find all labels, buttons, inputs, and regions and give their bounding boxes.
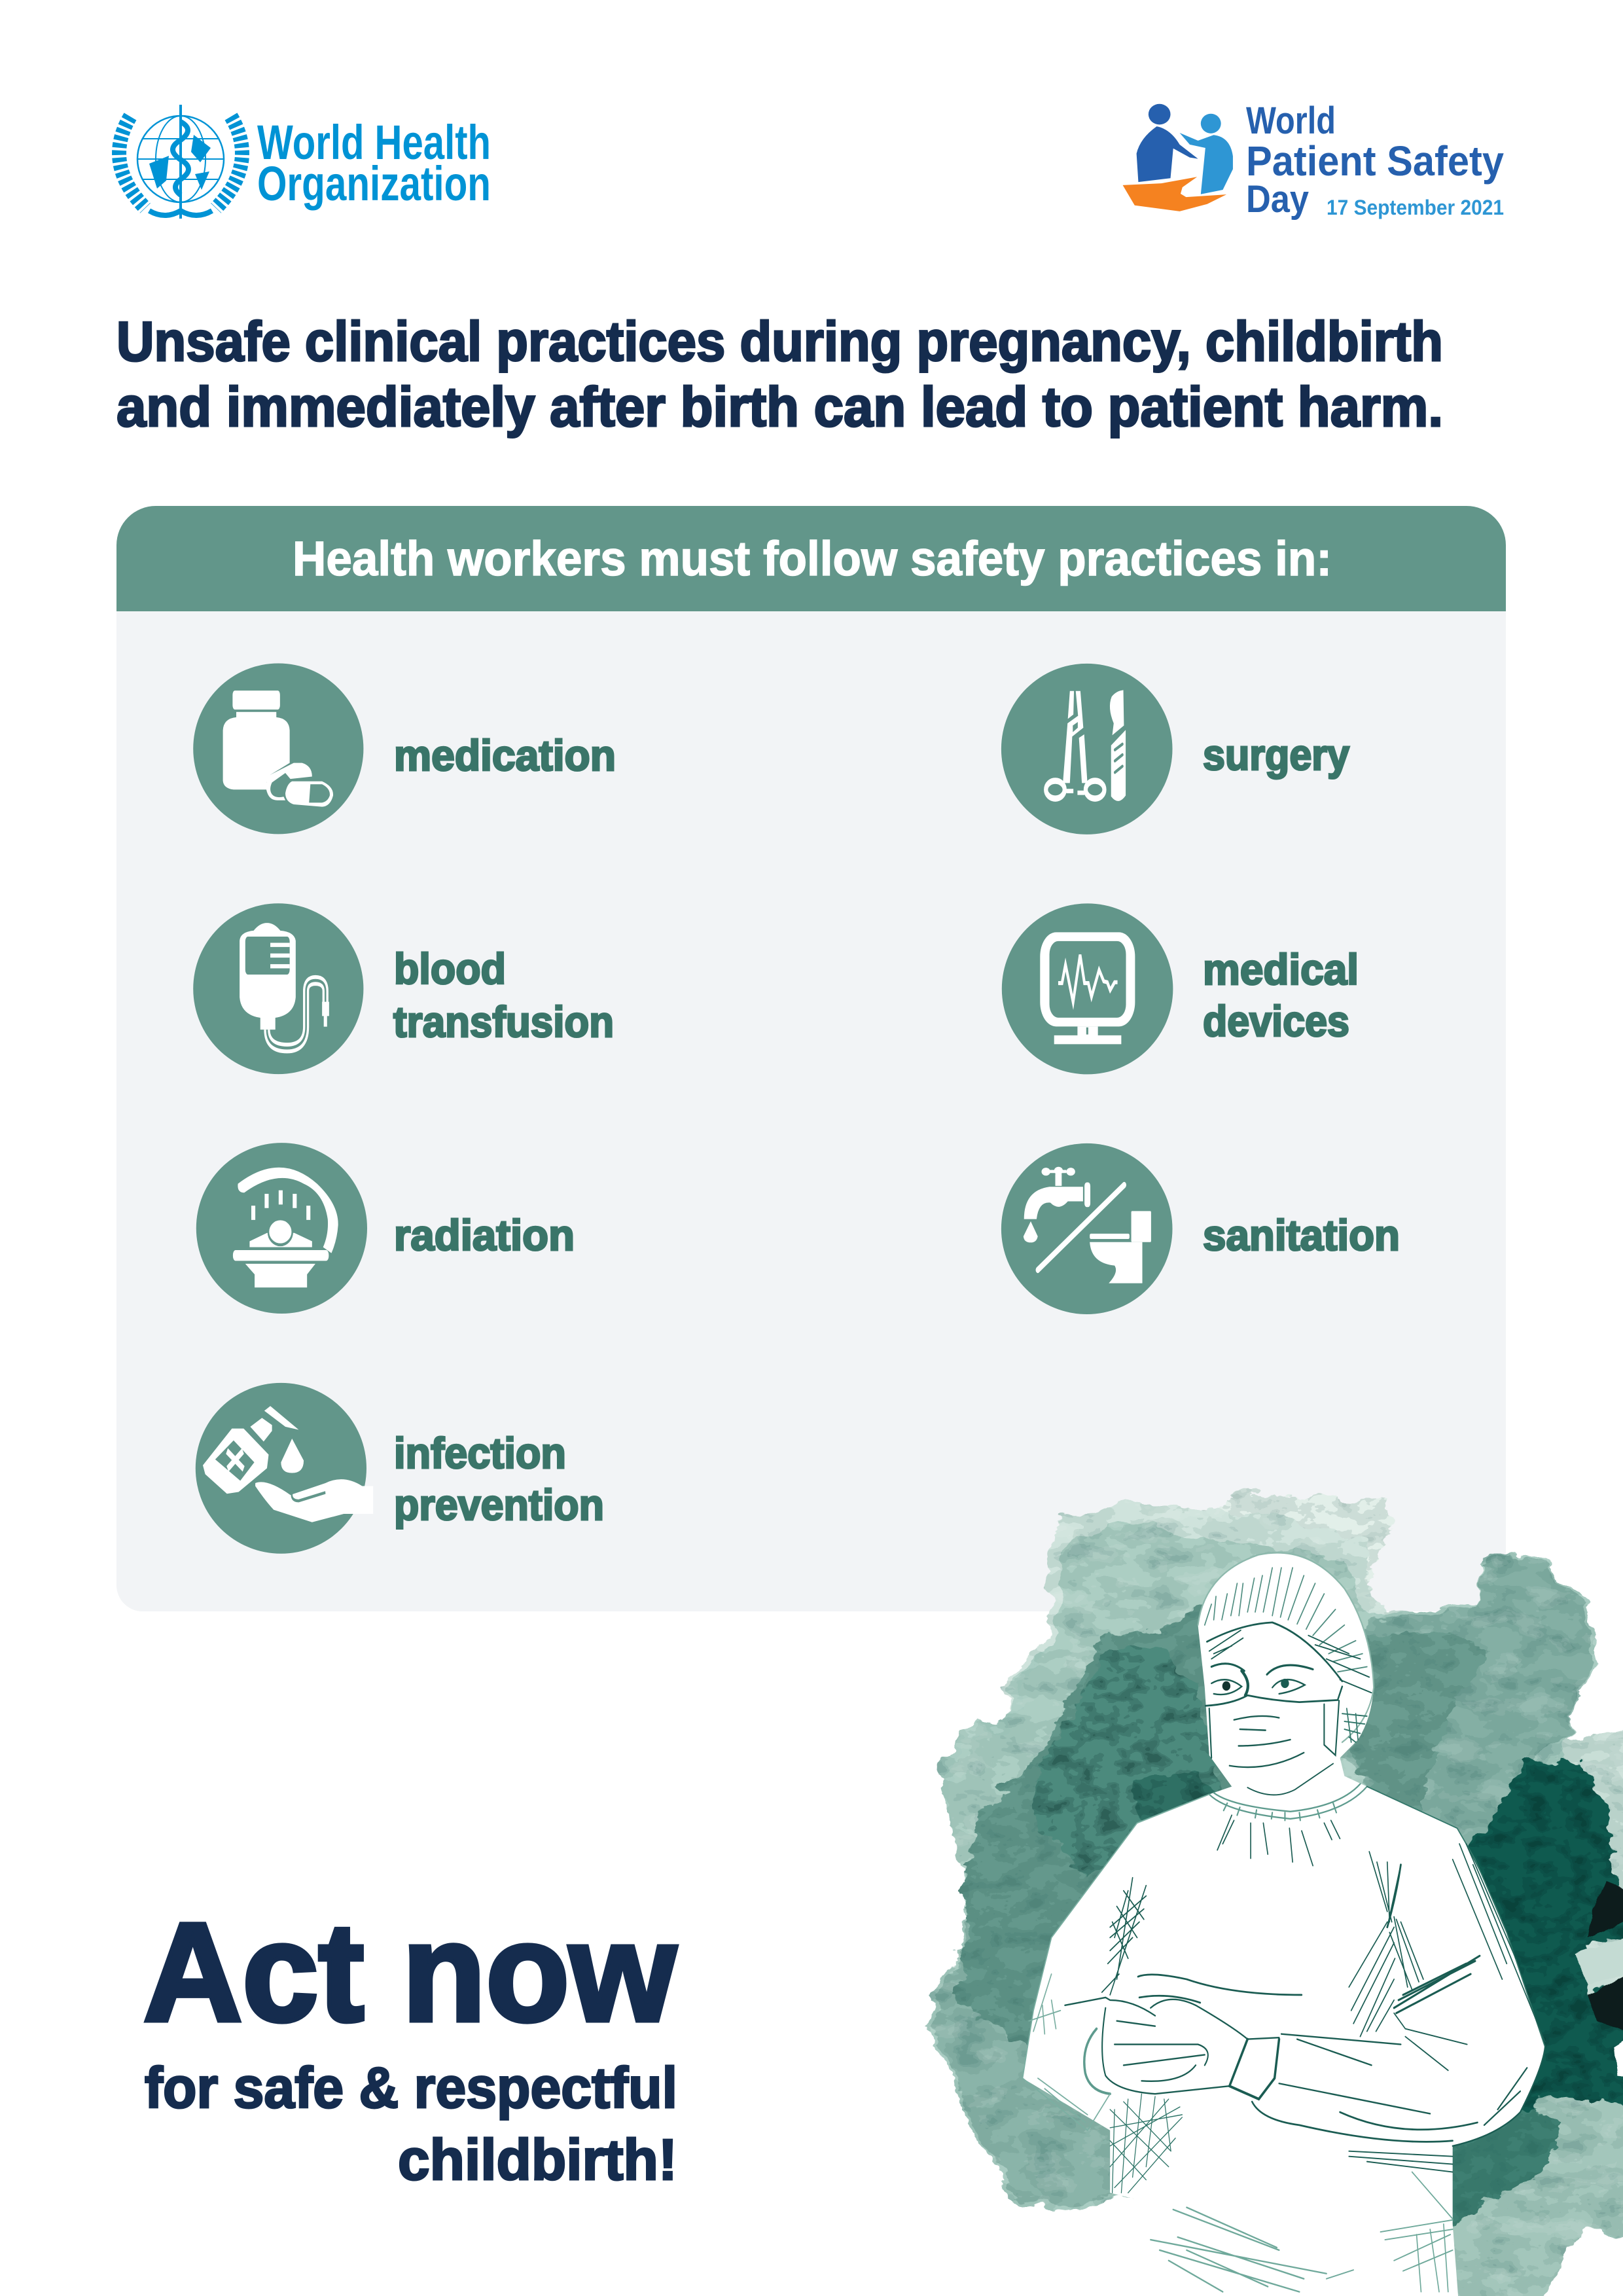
- text: World: World: [1246, 99, 1336, 142]
- icon: blood bag: [193, 903, 363, 1074]
- call to action: [143, 1894, 677, 2192]
- headline: [116, 311, 1443, 439]
- headline: Unsafe clinical practices during pregnancy, childbirth: [116, 311, 1443, 373]
- text: for safe and respectful: for safe & respectful: [145, 2055, 677, 2120]
- text: date: 17 September 2021: [1327, 196, 1504, 219]
- hands: [1065, 1998, 1478, 2172]
- crosshatch: [1110, 2094, 1182, 2193]
- panel header: Health workers must follow safety practices in:: [293, 531, 1332, 586]
- label: medical: [1203, 945, 1359, 994]
- icon: WHO emblem: [119, 105, 242, 219]
- watercolour wash: [926, 1495, 1623, 2296]
- icon: monitor: [1002, 903, 1173, 1074]
- item: surgery: [1001, 664, 1349, 834]
- text: Patient Safety: Patient Safety: [1246, 137, 1504, 185]
- collar: [1209, 1784, 1367, 1866]
- shoulders and arms: [1023, 1787, 1545, 2146]
- icon: tap and toilet: [1001, 1143, 1172, 1314]
- label: infection: [394, 1429, 566, 1477]
- label: radiation: [394, 1211, 575, 1259]
- icon: scanner: [196, 1143, 367, 1314]
- label: prevention: [394, 1480, 604, 1529]
- label: devices: [1203, 997, 1349, 1045]
- surgical cap: [1198, 1552, 1374, 1742]
- text: childbirth: childbirth!: [398, 2127, 677, 2192]
- left hatching: [1102, 1878, 1146, 1995]
- item: sanitation: [1001, 1143, 1400, 1314]
- item: medical devices: [1002, 903, 1359, 1074]
- World Patient Safety Day logo: [1123, 99, 1504, 221]
- item: radiation: [196, 1143, 575, 1314]
- panel header: [116, 506, 1506, 611]
- icon: pill bottle and capsules: [193, 664, 363, 834]
- label: [394, 1429, 604, 1529]
- figure line work: [1023, 1552, 1545, 2292]
- illustration: health worker on watercolour wash: [926, 1495, 1623, 2296]
- WHO logo: [119, 105, 491, 219]
- body fold: [1138, 1975, 1302, 2003]
- label: medication: [394, 731, 616, 780]
- label: [393, 944, 614, 1046]
- item: infection prevention: [196, 1383, 604, 1554]
- icon: caregiver figures and hand: [1123, 104, 1233, 211]
- text: Day: Day: [1246, 178, 1309, 221]
- item: medication: [193, 664, 616, 834]
- label: sanitation: [1203, 1211, 1400, 1259]
- icon: forceps and scalpel: [1001, 664, 1172, 834]
- icon: sanitiser and hand: [196, 1383, 373, 1554]
- panel: safety practices: [116, 506, 1506, 1611]
- eyes and brows: [1211, 1664, 1313, 1695]
- text: Act now: Act now: [143, 1894, 677, 2051]
- label: blood: [394, 944, 506, 993]
- mask: [1205, 1687, 1342, 1795]
- label: [1203, 945, 1359, 1045]
- text: Organization: Organization: [257, 156, 491, 211]
- label: surgery: [1203, 730, 1349, 779]
- figure silhouette: [1023, 1552, 1545, 2296]
- left sleeve: [1023, 1974, 1110, 2130]
- item: blood transfusion: [193, 903, 614, 1074]
- headline: and immediately after birth can lead to patient harm.: [116, 376, 1443, 439]
- text: World Health: World Health: [257, 115, 491, 170]
- lower folds: [1150, 2208, 1327, 2292]
- label: transfusion: [393, 997, 614, 1046]
